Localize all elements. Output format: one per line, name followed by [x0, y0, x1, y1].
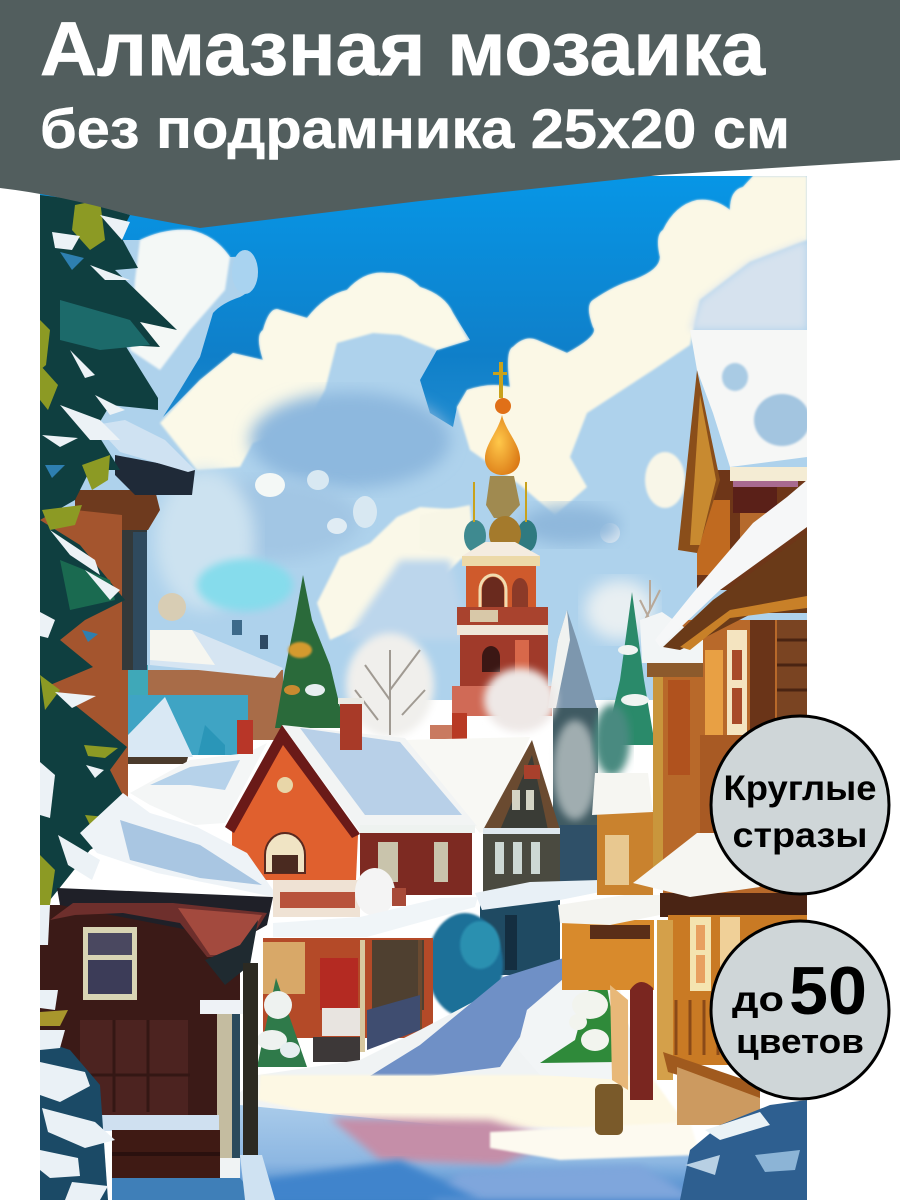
bottom-right snowy pine — [680, 1100, 807, 1200]
red house — [130, 698, 478, 1067]
right street buildings — [558, 330, 810, 1135]
small cloud puffs — [255, 473, 285, 497]
lower wing — [660, 893, 807, 917]
header banner — [0, 0, 900, 228]
left snow roof — [130, 743, 267, 825]
cloud mass base — [40, 176, 807, 700]
red door — [630, 982, 653, 1100]
distant left buildings — [128, 593, 283, 764]
gabled upper house — [697, 470, 807, 590]
far orange house — [597, 810, 653, 895]
secondary spire and far trees — [484, 580, 660, 828]
sky — [40, 176, 753, 427]
porch — [263, 938, 433, 1038]
subtitle: без подрамника 25х20 см — [40, 97, 790, 160]
left brown house — [40, 420, 195, 800]
badge: up to 50 colours: 50 — [789, 953, 867, 1029]
white roof and dark gable house — [402, 713, 610, 975]
fir tree behind red house — [275, 575, 345, 728]
badge: round rhinestones — [711, 716, 889, 894]
church cloud cream — [457, 176, 807, 515]
snow bank — [525, 990, 620, 1079]
main roof — [282, 725, 477, 832]
left fir tree — [40, 195, 177, 910]
church tower — [452, 362, 552, 716]
porch shop — [562, 920, 654, 990]
lower-left snowy pine — [40, 905, 115, 1200]
upper-left cloud highlight — [130, 230, 230, 370]
turquoise glow — [197, 559, 293, 611]
snowy street — [220, 958, 696, 1200]
blue bush — [427, 913, 503, 1017]
central cloud cream — [160, 273, 468, 470]
badge: up to 50 colours: до — [732, 980, 784, 1019]
balcony — [273, 880, 360, 917]
right-top lavender cloud — [690, 240, 807, 330]
title — [40, 7, 790, 160]
cloud shadow — [250, 392, 450, 488]
painting: winter town — [40, 176, 810, 1200]
badge: up to 50 colours: цветов — [736, 1023, 864, 1061]
badge: up to 50 colours — [711, 921, 889, 1099]
barrel — [595, 1084, 623, 1135]
title: Алмазная мозаика — [40, 7, 766, 92]
frosted tree — [346, 633, 434, 737]
green bush — [540, 990, 612, 1063]
badge: round rhinestones: стразы — [732, 816, 868, 855]
tall orange wall — [663, 620, 779, 893]
small snowy pine — [257, 978, 307, 1067]
badge: round rhinestones: Круглые — [724, 769, 876, 808]
lower cloud cream — [317, 507, 470, 640]
left bottom cabin — [40, 793, 275, 1200]
clouds — [40, 176, 807, 700]
gable wall — [232, 725, 358, 880]
right wing — [360, 830, 472, 895]
